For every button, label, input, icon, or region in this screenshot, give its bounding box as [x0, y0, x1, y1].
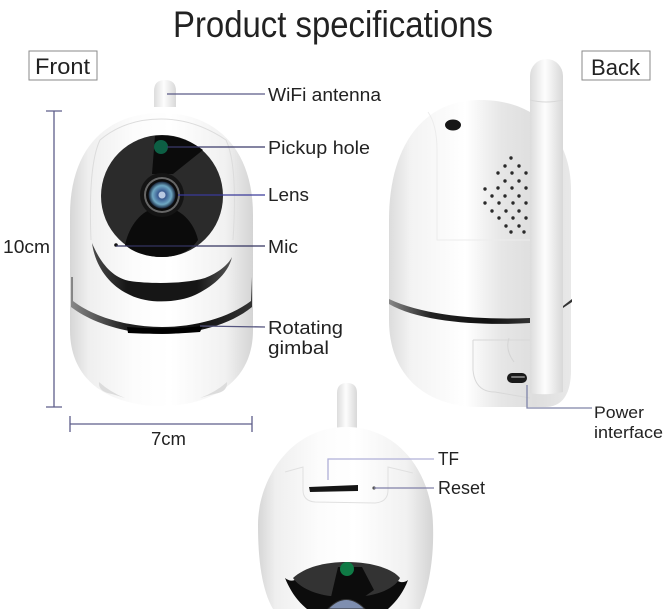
label: TF: TF	[438, 449, 459, 469]
back antenna	[530, 59, 563, 394]
bottom body	[258, 427, 433, 609]
label: Front	[29, 51, 97, 80]
width dimension: 7cm	[70, 416, 252, 449]
label: Rotating gimbal	[268, 318, 343, 358]
bottom antenna	[337, 383, 357, 428]
label: Front: Front	[35, 54, 90, 79]
callout labels	[268, 85, 663, 498]
height dimension: 10cm: 10cm	[3, 237, 50, 257]
icon: pickup hole	[154, 140, 168, 154]
callout lines	[116, 94, 592, 488]
dark smile	[92, 243, 232, 301]
height dimension: 10cm	[3, 111, 62, 407]
icon: TF slot	[309, 485, 358, 492]
label: Reset: Reset	[438, 478, 485, 498]
feet	[99, 382, 227, 398]
icon: bottom lens	[328, 600, 365, 609]
dark dome	[293, 562, 400, 596]
icon: reset hole	[372, 486, 376, 490]
wedge under pickup hole	[331, 567, 374, 597]
label: Mic: Mic	[268, 237, 298, 257]
icon: back hole	[445, 120, 461, 130]
bottom camera	[258, 383, 433, 609]
back band	[389, 299, 530, 324]
head seam	[90, 119, 234, 240]
dark faceplate shapes	[125, 207, 198, 257]
back body	[389, 100, 571, 407]
icon: lens	[140, 173, 184, 217]
label: Rotating gimbal: gimbal	[268, 338, 329, 358]
icon: mic	[114, 243, 118, 247]
front camera	[70, 80, 253, 406]
black crescent	[285, 578, 408, 609]
label: Rotating gimbal: Rotating	[268, 318, 343, 338]
lens housing	[101, 135, 223, 257]
width dimension: 7cm: 7cm	[151, 429, 186, 449]
icon: bottom pickup hole	[340, 562, 354, 576]
label: Back	[582, 51, 650, 80]
rotating band	[71, 277, 252, 334]
label: Lens: Lens	[268, 185, 309, 205]
back seams	[428, 112, 530, 240]
card cover panel	[285, 467, 413, 503]
back camera	[389, 59, 572, 407]
label: Power interface: interface	[594, 424, 663, 442]
label: Power interface: Power	[594, 404, 645, 422]
label: Pickup hole: Pickup hole	[268, 138, 370, 158]
label: Power interface	[594, 404, 663, 442]
label: WiFi antenna: WiFi antenna	[268, 85, 382, 105]
title: Product specifications	[173, 4, 493, 45]
camera body	[70, 113, 253, 406]
label: Back: Back	[591, 55, 641, 80]
icon: front antenna	[154, 80, 176, 107]
icon: speaker grille	[483, 156, 528, 234]
icon: power port	[507, 373, 527, 383]
